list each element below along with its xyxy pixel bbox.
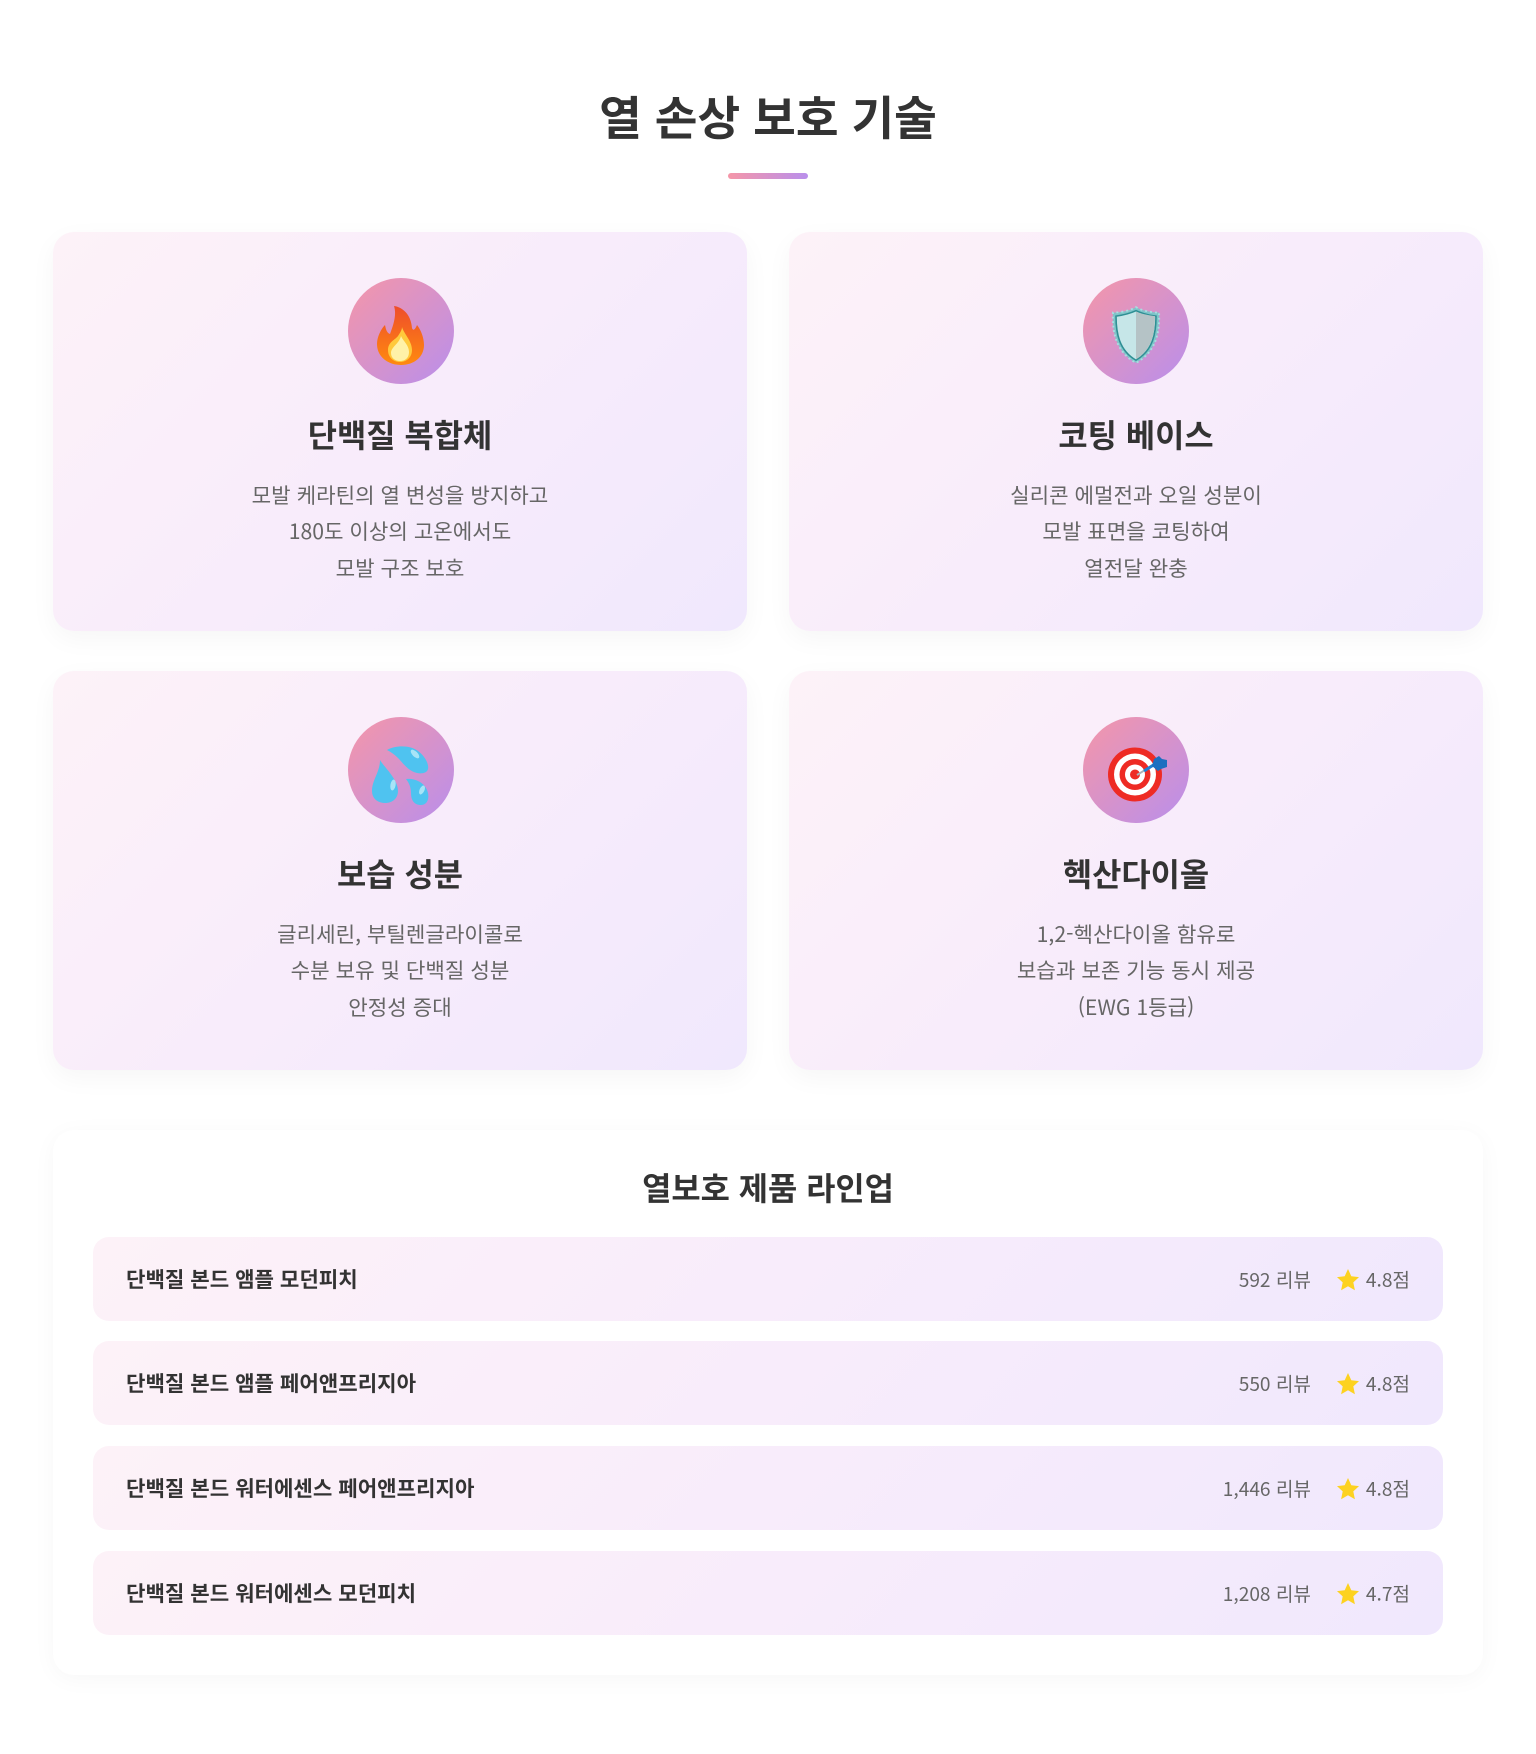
description: 180도 이상의 고온에서도 bbox=[289, 515, 511, 546]
icon: star bbox=[1337, 1269, 1359, 1290]
product row 1: 단백질 본드 앰플 모던피치 bbox=[126, 1263, 358, 1294]
panel: product lineup bbox=[53, 1130, 1483, 1675]
description bbox=[1010, 479, 1262, 583]
product row 2: 단백질 본드 앰플 페어앤프리지아 bbox=[126, 1367, 416, 1398]
title: 열 손상 보호 기술 bbox=[599, 82, 937, 149]
product row 4: 1,208 리뷰 bbox=[1223, 1578, 1311, 1606]
heading: 단백질 복합체 bbox=[308, 411, 492, 457]
icon: shield bbox=[1083, 278, 1189, 384]
description: (EWG 1등급) bbox=[1078, 991, 1194, 1022]
description: 보습과 보존 기능 동시 제공 bbox=[1017, 954, 1255, 985]
description: 모발 표면을 코팅하여 bbox=[1042, 515, 1230, 546]
description bbox=[1017, 918, 1255, 1022]
description: 글리세린, 부틸렌글라이콜로 bbox=[277, 918, 523, 949]
description: 실리콘 에멀전과 오일 성분이 bbox=[1010, 479, 1262, 510]
product row 3 bbox=[93, 1446, 1443, 1530]
product row 4 bbox=[93, 1550, 1443, 1634]
description bbox=[277, 918, 523, 1022]
description: 수분 보유 및 단백질 성분 bbox=[291, 954, 509, 985]
product row 1: 592 리뷰 bbox=[1239, 1265, 1311, 1293]
description: 안정성 증대 bbox=[348, 991, 452, 1022]
product row 3: 단백질 본드 워터에센스 페어앤프리지아 bbox=[126, 1472, 474, 1503]
heading: 헥산다이올 bbox=[1063, 850, 1209, 896]
product row 1: 4.8점 bbox=[1366, 1265, 1410, 1293]
panel: 보습 성분 bbox=[53, 671, 747, 1070]
panel: 코팅 베이스 bbox=[789, 232, 1483, 631]
panel: 헥산다이올 bbox=[789, 671, 1483, 1070]
product row 3: 1,446 리뷰 bbox=[1223, 1474, 1311, 1502]
panel: 단백질 복합체 bbox=[53, 232, 747, 631]
product row 3: 4.8점 bbox=[1366, 1474, 1410, 1502]
description: 열전달 완충 bbox=[1084, 552, 1188, 583]
icon: star bbox=[1337, 1583, 1359, 1604]
heading: 보습 성분 bbox=[337, 850, 463, 896]
product row 2 bbox=[93, 1341, 1443, 1425]
title underline bbox=[728, 173, 808, 179]
icon: star bbox=[1337, 1478, 1359, 1500]
icon: water drops bbox=[348, 717, 454, 823]
description bbox=[252, 479, 548, 583]
description: 모발 케라틴의 열 변성을 방지하고 bbox=[252, 479, 548, 510]
product row 2: 550 리뷰 bbox=[1239, 1369, 1311, 1397]
lineup heading: 열보호 제품 라인업 bbox=[642, 1164, 894, 1210]
product row 4: 단백질 본드 워터에센스 모던피치 bbox=[126, 1576, 416, 1608]
product row 1 bbox=[93, 1237, 1443, 1321]
icon: star bbox=[1337, 1373, 1359, 1394]
icon: flame bbox=[348, 278, 454, 384]
icon: target with dart bbox=[1083, 717, 1189, 823]
product row 4: 4.7점 bbox=[1366, 1578, 1410, 1606]
description: 모발 구조 보호 bbox=[336, 552, 464, 583]
heading: 코팅 베이스 bbox=[1058, 411, 1214, 457]
product row 2: 4.8점 bbox=[1366, 1369, 1410, 1397]
description: 1,2-헥산다이올 함유로 bbox=[1037, 918, 1235, 949]
